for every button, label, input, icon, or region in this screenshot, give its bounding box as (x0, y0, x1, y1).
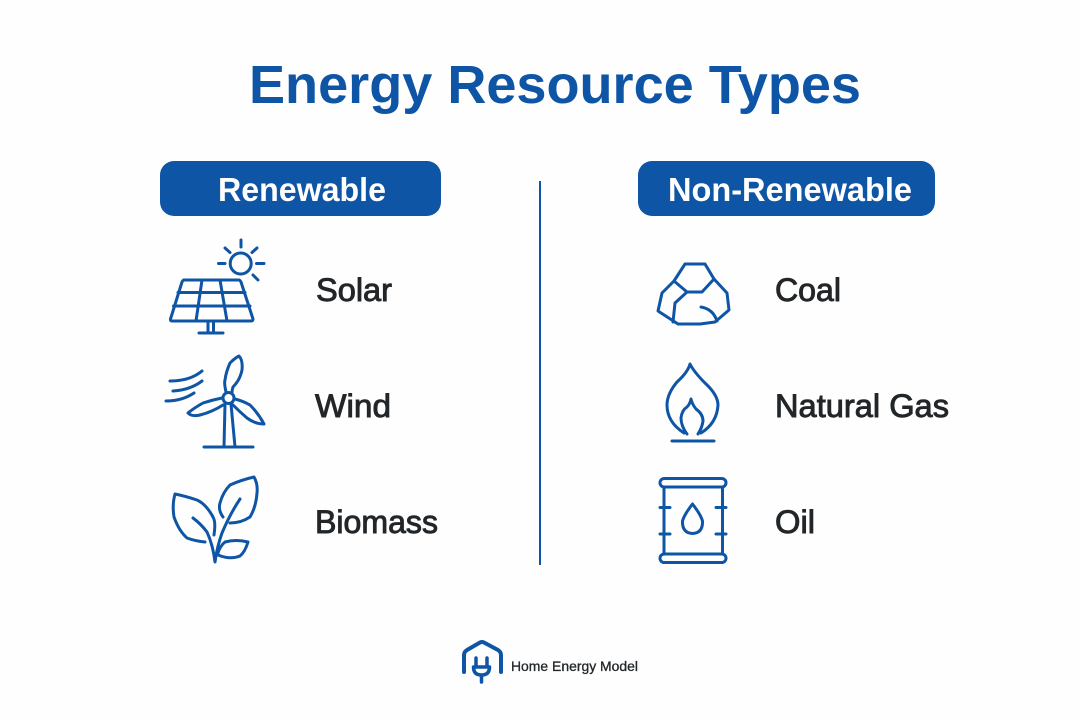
renewable column header (160, 161, 441, 216)
icon: wind turbine (166, 356, 264, 447)
label: Biomass: Biomass (315, 504, 438, 540)
non-renewable column header: Non-Renewable (668, 171, 912, 208)
non-renewable column header (638, 161, 935, 216)
icon: leaves (173, 477, 257, 562)
label: Coal: Coal (775, 272, 841, 308)
icon: oil barrel (660, 478, 726, 562)
label: Wind: Wind (315, 388, 391, 424)
label: Oil: Oil (775, 504, 815, 540)
icon: house with plug (464, 642, 501, 682)
label: Natural Gas: Natural Gas (775, 388, 949, 424)
brand name: Home Energy Model (511, 659, 638, 674)
icon: coal (658, 264, 729, 324)
logo: Home Energy Model (464, 642, 638, 682)
title: Energy Resource Types (249, 55, 861, 115)
icon: solar panel with sun (170, 240, 264, 333)
icon: natural gas flame (667, 364, 718, 441)
label: Solar: Solar (316, 272, 392, 308)
renewable column header: Renewable (218, 171, 386, 208)
